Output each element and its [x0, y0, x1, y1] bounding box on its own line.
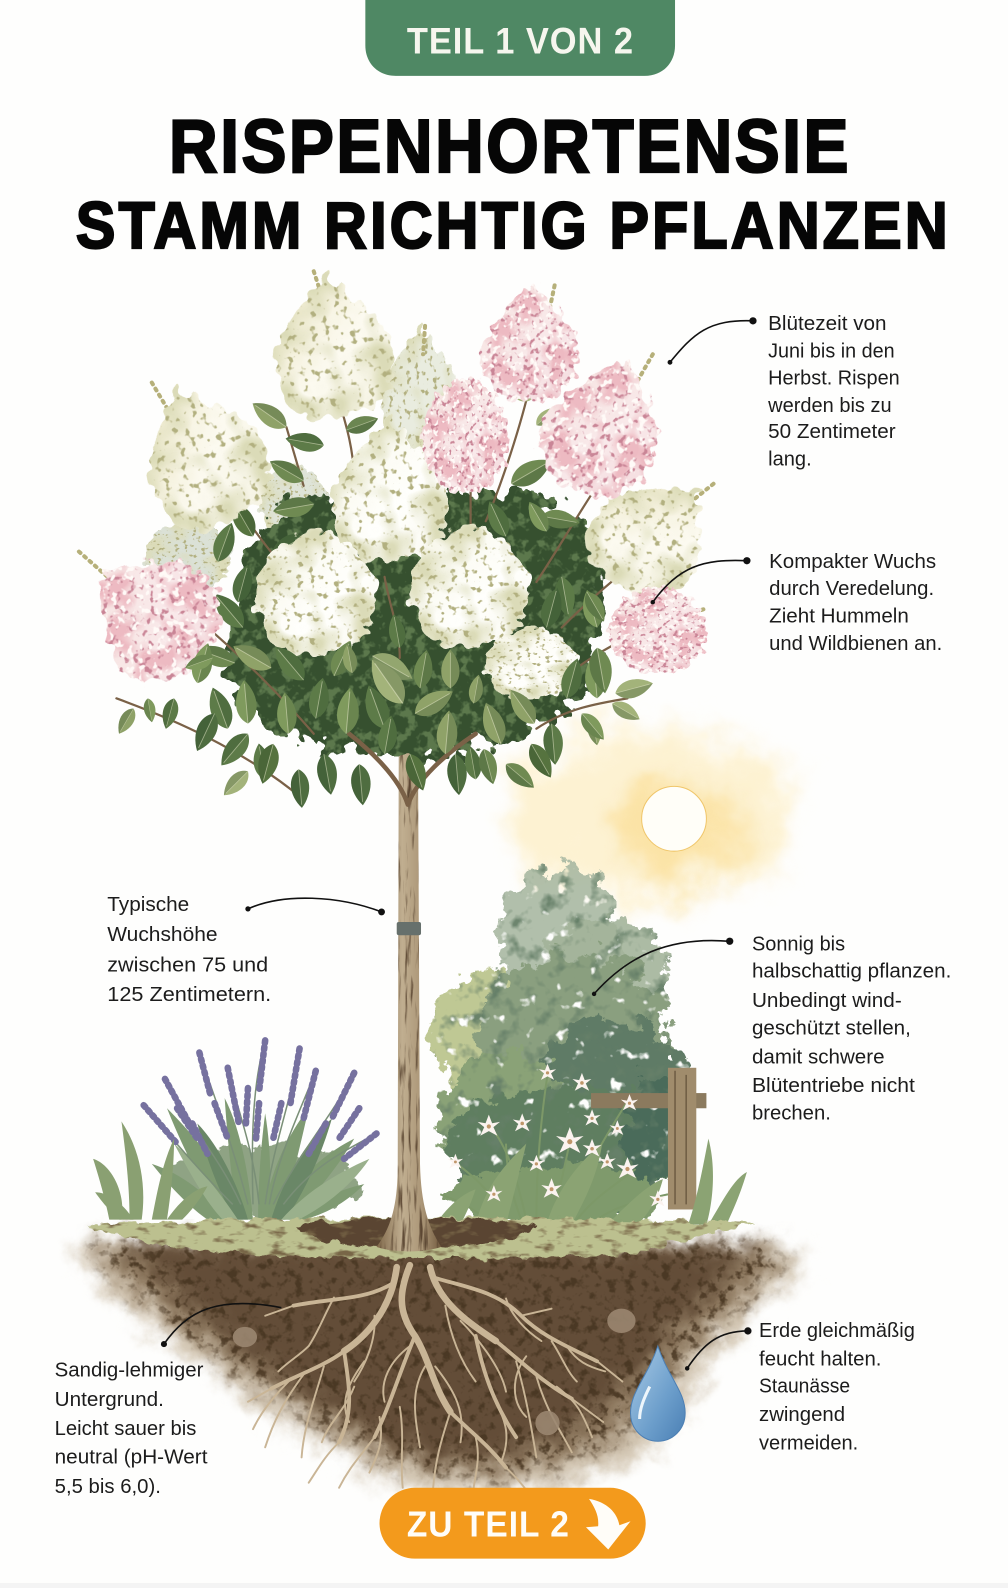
callout: watering: [685, 1320, 915, 1454]
callout: location: Blütentriebe nicht: [752, 1075, 915, 1097]
callout: bloom time: [668, 313, 900, 471]
button: zu Teil 2: ZU TEIL 2: [407, 1504, 569, 1545]
upper leaves: [193, 379, 614, 672]
callout: soil: [55, 1303, 281, 1498]
pink flower panicles: [60, 279, 706, 702]
callout: soil: 5,5 bis 6,0).: [55, 1476, 161, 1498]
callout: growth height: Typische: [107, 894, 189, 916]
callout: soil: Sandig-lehmiger: [55, 1359, 204, 1381]
lavender plant: [144, 1040, 376, 1220]
callout: soil: Untergrund.: [55, 1389, 164, 1411]
flowering perennials: [435, 1064, 747, 1225]
callout: bloom time: Herbst. Rispen: [768, 368, 900, 390]
white and cream flower panicles: [119, 269, 739, 698]
callout: bloom time: Juni bis in den: [768, 340, 895, 362]
tree trunk with stake band: [376, 749, 441, 1251]
sun with yellow watercolor halo: [511, 726, 794, 904]
callout: location: damit schwere: [752, 1047, 885, 1069]
tip sprigs of panicles: [79, 271, 713, 619]
callout: compact growth: [651, 551, 942, 655]
callout: growth height: zwischen 75 und: [107, 955, 268, 977]
soil stones: [233, 1309, 636, 1435]
callout: watering: feucht halten.: [759, 1348, 881, 1370]
callout: growth height: 125 Zentimetern.: [107, 984, 271, 1006]
callout: watering: zwingend: [759, 1404, 845, 1426]
callout: bloom time: 50 Zentimeter: [768, 421, 896, 443]
hydrangea crown: [60, 269, 739, 809]
callout: location: geschützt stellen,: [752, 1017, 911, 1039]
callout: bloom time: Blütezeit von: [768, 313, 887, 335]
soil cross-section: [73, 1241, 805, 1494]
background shrub: [433, 865, 688, 1211]
water drop: [631, 1346, 685, 1441]
rear flower panicles: [145, 326, 461, 589]
branches: [116, 380, 648, 805]
callout: compact growth: und Wildbienen an.: [769, 633, 942, 655]
button: zu Teil 2: [380, 1488, 646, 1559]
callout: location: Unbedingt wind-: [752, 990, 902, 1012]
callout: bloom time: lang.: [768, 449, 812, 471]
callout: soil: Leicht sauer bis: [55, 1418, 196, 1440]
callout: compact growth: Zieht Hummeln: [769, 605, 909, 627]
callout: growth height: [107, 894, 385, 1006]
ground surface and grass band: [86, 1217, 757, 1258]
callout: soil: neutral (pH-Wert: [55, 1447, 208, 1469]
tree roots: [248, 1265, 622, 1493]
callout: compact growth: Kompakter Wuchs: [769, 551, 936, 573]
title: [76, 106, 948, 263]
callout: location: Sonnig bis: [752, 933, 845, 955]
callout: location: [592, 933, 951, 1124]
title: RISPENHORTENSIE: [169, 106, 849, 189]
dark foliage mass: [230, 486, 600, 756]
lower leaves: [113, 637, 655, 809]
callout: watering: Staunässe: [759, 1376, 850, 1398]
callout: watering: vermeiden.: [759, 1432, 858, 1454]
callout: bloom time: werden bis zu: [767, 395, 892, 417]
top badge: [365, 0, 675, 76]
callout: compact growth: durch Veredelung.: [769, 578, 934, 600]
fence: [591, 1068, 706, 1209]
top badge: TEIL 1 VON 2: [407, 19, 633, 62]
title: STAMM RICHTIG PFLANZEN: [76, 189, 948, 263]
callout: growth height: Wuchshöhe: [107, 924, 218, 946]
callout: location: brechen.: [752, 1102, 831, 1124]
left grass clump: [93, 1121, 207, 1220]
callout: location: halbschattig pflanzen.: [752, 961, 951, 983]
icon: curved down arrow: [586, 1499, 631, 1550]
callout: watering: Erde gleichmäßig: [759, 1320, 915, 1342]
